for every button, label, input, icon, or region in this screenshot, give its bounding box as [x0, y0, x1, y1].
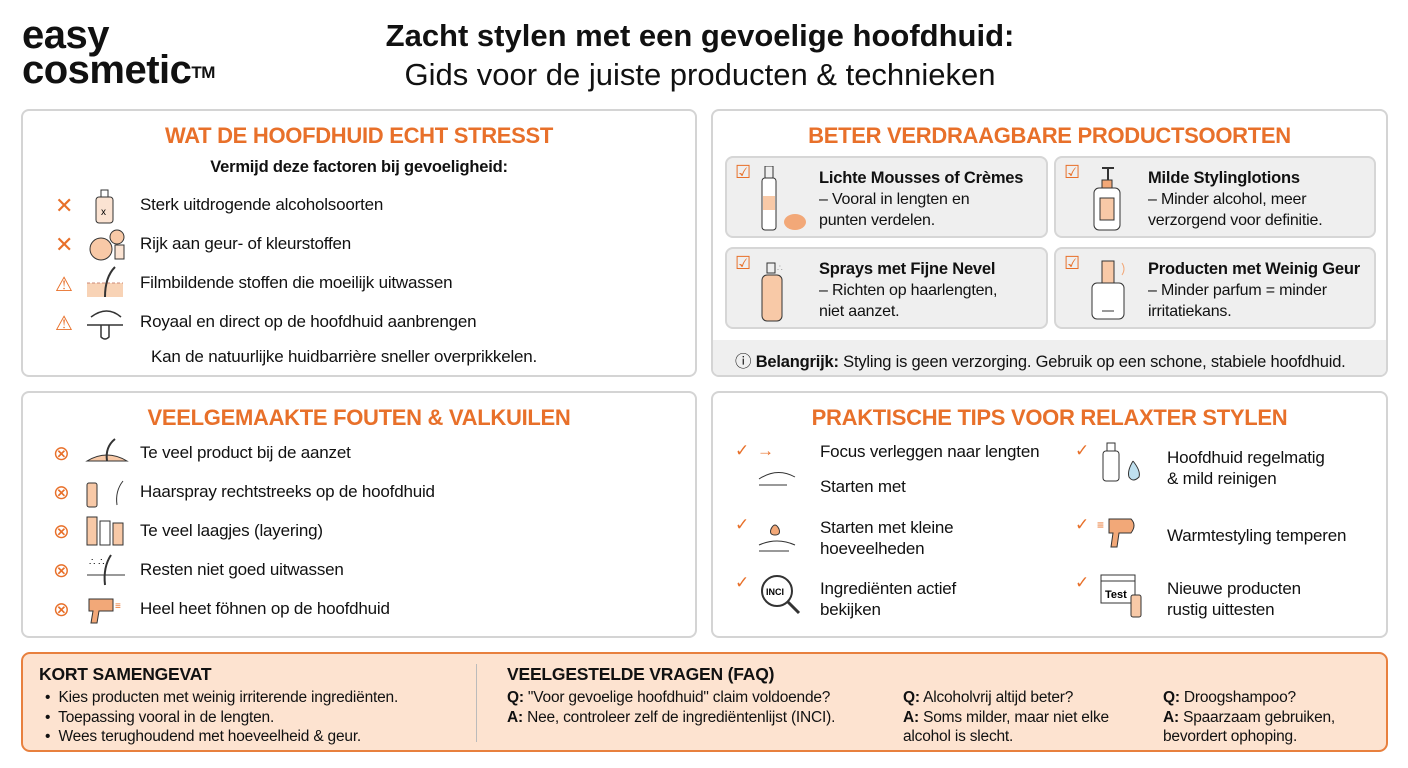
card: low fragrance: Producten met Weinig Geur [1148, 260, 1360, 278]
FAQ: Q: Alcoholvrij altijd beter? [903, 689, 1073, 706]
subheading: Vermijd deze factoren bij gevoeligheid: [210, 158, 508, 176]
FAQ: A: Soms milder, maar niet elke [903, 708, 1109, 726]
tips left column: INCI [766, 587, 784, 597]
title [386, 18, 1014, 92]
tips right column: Nieuwe producten [1167, 579, 1301, 598]
heading: BETER VERDRAAGBARE PRODUCTSOORTEN [808, 123, 1291, 148]
FAQ: alcohol is slecht. [903, 728, 1013, 745]
list: factors: x [101, 207, 106, 218]
card: low fragrance: – Minder parfum = minder [1148, 282, 1327, 299]
title: Zacht stylen met een gevoelige hoofdhuid: [386, 18, 1014, 53]
tips right column: ✓ [1075, 573, 1089, 592]
tips left column: ✓ [735, 441, 749, 460]
FAQ: A: Nee, controleer zelf de ingrediëntenlijst (INCI). [507, 708, 835, 726]
list: mistakes [53, 438, 435, 624]
list: mistakes: Te veel product bij de aanzet [140, 443, 351, 462]
tips right column: ✓ [1075, 441, 1089, 460]
tips left column: Starten met kleine [820, 518, 953, 537]
FAQ: Q: Droogshampoo? [1163, 689, 1296, 706]
list: factors: ✕ [55, 193, 73, 218]
list: mistakes: Resten niet goed uitwassen [140, 560, 344, 579]
tips right column: ≡ [1097, 518, 1104, 532]
tips right column: Hoofdhuid regelmatig [1167, 448, 1325, 467]
tips left column: Starten met [820, 477, 906, 496]
FAQ: bevordert ophoping. [1163, 728, 1297, 745]
list: mistakes: ⊗ [53, 599, 70, 621]
list: mistakes: Te veel laagjes (layering) [140, 521, 323, 540]
logo: cosmeticTM [22, 48, 215, 92]
logo: easy [22, 13, 109, 57]
card: low fragrance: ☑ [1064, 253, 1080, 273]
card: low fragrance: irritatiekans. [1148, 303, 1231, 320]
FAQ: Q: "Voor gevoelige hoofdhuid" claim voldoende? [507, 689, 830, 706]
list: mistakes: ⊗ [53, 443, 70, 465]
card: lotions: verzorgend voor definitie. [1148, 212, 1322, 229]
card: sprays: – Richten op haarlengten, [819, 282, 997, 299]
list: factors: Filmbildende stoffen die moeilijk uitwassen [140, 273, 452, 292]
panel: practical tips [711, 391, 1388, 638]
summary: • Toepassing vooral in de lengten. [45, 708, 274, 726]
panel: what stresses the scalp [21, 109, 697, 377]
heading: VEELGEMAAKTE FOUTEN & VALKUILEN [148, 405, 570, 430]
list: mistakes: ⊗ [53, 482, 70, 504]
FAQ: A: Spaarzaam gebruiken, [1163, 708, 1335, 726]
list: mistakes: ⊗ [53, 560, 70, 582]
card: sprays: ∴ [777, 263, 783, 273]
tips right column [1075, 441, 1346, 619]
list: mistakes: Haarspray rechtstreeks op de hoofdhuid [140, 482, 435, 501]
card: sprays [725, 247, 1048, 329]
note: important [713, 340, 1390, 379]
summary: • Kies producten met weinig irriterende ingrediënten. [45, 689, 398, 706]
panel: summary & FAQ [21, 652, 1388, 752]
FAQ: VEELGESTELDE VRAGEN (FAQ) [507, 664, 774, 684]
tips left column: bekijken [820, 600, 881, 619]
tips right column: Test [1105, 589, 1127, 601]
list: factors: Kan de natuurlijke huidbarrière sneller overprikkelen. [151, 347, 537, 366]
list: factors: Royaal en direct op de hoofdhuid aanbrengen [140, 312, 476, 331]
tips left column: Ingrediënten actief [820, 579, 956, 598]
card: low fragrance [1054, 247, 1376, 329]
title: Gids voor de juiste producten & technieken [404, 57, 996, 92]
list: mistakes: Heel heet föhnen op de hoofdhuid [140, 599, 390, 618]
tips left column: hoeveelheden [820, 539, 924, 558]
tips right column: & mild reinigen [1167, 469, 1276, 488]
list: factors: ⚠ [55, 313, 73, 335]
summary: KORT SAMENGEVAT [39, 664, 211, 684]
card: lotions [1054, 156, 1376, 238]
list: mistakes: ≡ [115, 601, 121, 612]
heading: PRAKTISCHE TIPS VOOR RELAXTER STYLEN [812, 405, 1287, 430]
tips right column: rustig uittesten [1167, 600, 1274, 619]
panel: better tolerated products [711, 109, 1388, 377]
list: factors: ⚠ [55, 274, 73, 296]
list: factors: Rijk aan geur- of kleurstoffen [140, 234, 351, 253]
card: lotions: – Minder alcohol, meer [1148, 191, 1306, 208]
card: sprays: Sprays met Fijne Nevel [819, 260, 995, 278]
list: mistakes: ∴ ∴ [89, 557, 105, 568]
list: mistakes: ⊗ [53, 521, 70, 543]
note: important: ⓘ Belangrijk: Styling is geen verzorging. Gebruik op een schone, stabiele hoofdhuid. [735, 353, 1346, 371]
card: mousses [725, 156, 1048, 238]
tips left column: ✓ [735, 515, 749, 534]
card: lotions: Milde Stylinglotions [1148, 169, 1300, 187]
card: mousses: – Vooral in lengten en [819, 191, 969, 208]
card: mousses: punten verdelen. [819, 212, 935, 229]
tips left column [735, 441, 1039, 619]
panel: common mistakes [21, 391, 697, 638]
logo [22, 13, 215, 92]
list: factors: ✕ [55, 232, 73, 257]
card: sprays: ☑ [735, 253, 751, 273]
tips left column: ✓ [735, 573, 749, 592]
summary: • Wees terughoudend met hoeveelheid & geur. [45, 728, 361, 745]
tips left column: → [757, 441, 774, 460]
list: factors [55, 190, 537, 366]
heading: WAT DE HOOFDHUID ECHT STRESST [165, 123, 553, 148]
card: sprays: niet aanzet. [819, 303, 899, 320]
FAQ [507, 664, 1335, 745]
list: factors: Sterk uitdrogende alcoholsoorten [140, 195, 383, 214]
tips left column: Focus verleggen naar lengten [820, 442, 1039, 461]
tips right column: ✓ [1075, 515, 1089, 534]
card: mousses: Lichte Mousses of Crèmes [819, 169, 1023, 187]
summary [39, 664, 398, 745]
tips right column: Warmtestyling temperen [1167, 526, 1346, 545]
card: lotions: ☑ [1064, 162, 1080, 182]
card: mousses: ☑ [735, 162, 751, 182]
